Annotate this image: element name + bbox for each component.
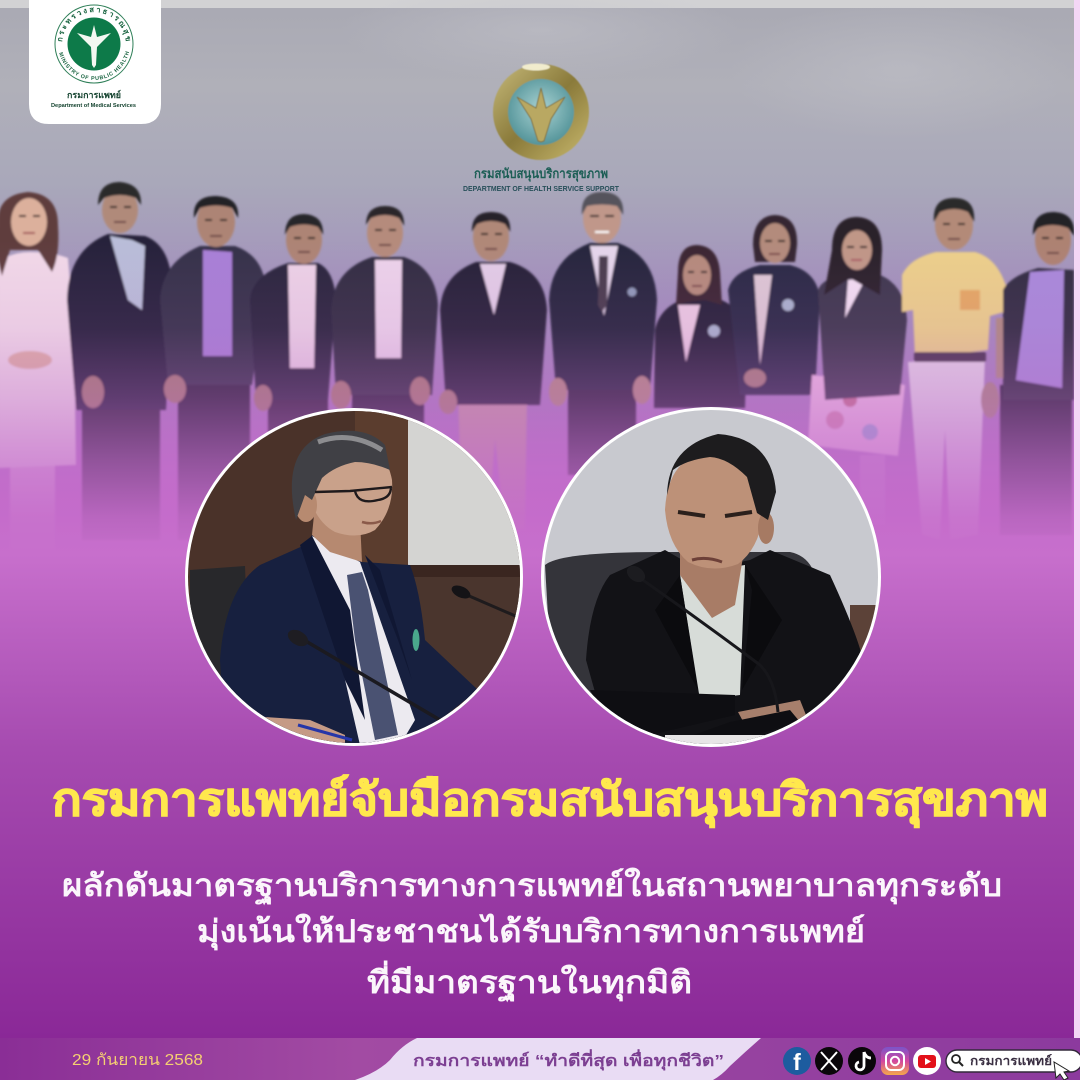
right edge light strip — [1074, 0, 1080, 1038]
headline: กรมการแพทย์จับมือกรมสนับสนุนบริการสุขภาพ — [52, 774, 1048, 828]
slogan ribbon — [355, 1038, 761, 1080]
body line 1: ผลักดันมาตรฐานบริการทางการแพทย์ในสถานพยาบาลทุกระดับ — [62, 867, 1002, 906]
purple gradient overlay fading the photo — [0, 240, 1080, 556]
person 1: woman in pink dress — [0, 192, 76, 550]
person 4: man in dark jacket — [250, 214, 336, 535]
logo English name: Department of Medical Services — [51, 103, 136, 109]
hand and pen — [265, 717, 345, 745]
glasses — [315, 487, 392, 501]
eyes and mouth — [678, 512, 752, 516]
search pill: กรมการแพทย์ — [970, 1054, 1052, 1068]
tie — [347, 572, 398, 740]
circular portrait: left official — [180, 400, 530, 760]
logo Thai name: กรมการแพทย์ — [67, 89, 121, 100]
person 7: man in suit with tie — [549, 192, 657, 475]
lapel — [300, 536, 365, 720]
shirt — [312, 536, 415, 745]
icon: TikTok — [848, 1047, 876, 1075]
person 11: man in yellow polo and white trousers — [902, 198, 1011, 540]
search pill — [946, 1050, 1080, 1080]
icon: Ministry of Public Health seal — [54, 4, 134, 84]
body text block — [62, 867, 1002, 1003]
wall sign Thai name: กรมสนับสนุนบริการสุขภาพ — [474, 166, 608, 182]
person 9: woman in blazer with patterned blouse — [728, 215, 820, 395]
person 6: man in blazer and beige trousers — [439, 212, 547, 530]
person 10: woman with floral skirt — [808, 217, 907, 525]
hair — [292, 431, 390, 520]
date: 29 กันยายน 2568 — [72, 1052, 203, 1069]
hand — [738, 700, 810, 725]
shirt — [680, 565, 745, 700]
icon: Ministry of Public Health seal: กระทรวงสาธารณสุข — [58, 7, 130, 42]
footer bar — [0, 1038, 1080, 1080]
slogan: กรมการแพทย์ “ทำดีที่สุด เพื่อทุกชีวิต” — [413, 1049, 724, 1071]
circular portrait: right official — [535, 400, 885, 760]
neck and face — [680, 554, 742, 618]
arm — [590, 690, 735, 735]
logo card: Department of Medical Services — [29, 0, 161, 124]
group photo of twelve people — [0, 182, 1074, 550]
icon: Instagram — [881, 1047, 909, 1075]
icon: YouTube — [913, 1047, 941, 1075]
icon: gold seal — [493, 64, 589, 160]
body line 2: มุ่งเน้นให้ประชาชนได้รับบริการทางการแพทย์ — [197, 913, 865, 951]
icon: Ministry of Public Health seal: MINISTRY OF PUBLIC HEALTH — [59, 51, 130, 80]
neck and face — [312, 512, 362, 562]
icon: X — [815, 1047, 843, 1075]
desk microphone — [664, 595, 780, 712]
icon: cursor — [1054, 1062, 1069, 1080]
icon: facebook: f — [793, 1049, 801, 1075]
lapel pin — [412, 629, 420, 651]
background: meeting room wall — [0, 0, 1080, 570]
jacket — [586, 550, 864, 745]
person 12: man in blazer with lilac polo — [1000, 212, 1074, 535]
hair — [667, 434, 776, 520]
jacket — [220, 535, 478, 745]
person 8: woman in blazer — [654, 245, 747, 408]
lower purple background panel — [0, 555, 1080, 1039]
wall emblem: Department of Health Service Support — [463, 64, 620, 193]
person 5: man in dark suit — [331, 206, 438, 530]
icon: facebook — [783, 1047, 811, 1075]
chair — [545, 552, 820, 700]
person 2: man in dark suit — [67, 182, 172, 540]
body line 3: ที่มีมาตรฐานในทุกมิติ — [367, 960, 692, 1003]
chair — [190, 566, 246, 696]
lapel shading — [670, 576, 697, 686]
wall sign English name: DEPARTMENT OF HEALTH SERVICE SUPPORT — [463, 186, 620, 193]
microphones — [307, 640, 440, 720]
person 3: man with purple shirt — [160, 196, 266, 540]
